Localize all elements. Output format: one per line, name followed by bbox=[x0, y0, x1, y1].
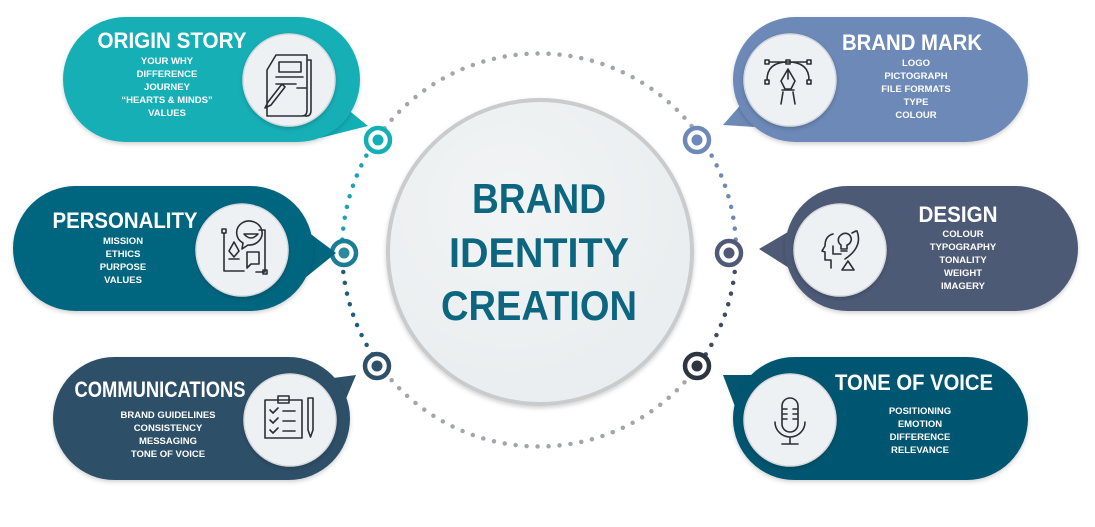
panel: design: COLOUR bbox=[942, 229, 984, 240]
node: origin bbox=[366, 128, 390, 152]
panel: personality: VALUES bbox=[104, 275, 142, 286]
panel: communications: TONE OF VOICE bbox=[131, 449, 205, 460]
panel: tone of voice: EMOTION bbox=[898, 419, 942, 430]
title: BRAND bbox=[472, 175, 606, 222]
panel: communications: MESSAGING bbox=[139, 436, 197, 447]
panel: personality: MISSION bbox=[103, 236, 143, 247]
panel: brand mark: LOGO bbox=[902, 58, 930, 69]
panel: tone of voice: DIFFERENCE bbox=[890, 432, 950, 443]
title: IDENTITY bbox=[449, 229, 629, 276]
panel: brand mark: PICTOGRAPH bbox=[884, 71, 948, 82]
panel: brand mark: COLOUR bbox=[895, 110, 937, 121]
panel: design: TONALITY bbox=[939, 255, 987, 266]
panel: design: TYPOGRAPHY bbox=[930, 242, 997, 253]
center circle bbox=[388, 100, 692, 404]
node: communications bbox=[365, 354, 389, 378]
panel: brand mark bbox=[723, 17, 1028, 142]
panel: design: DESIGN bbox=[918, 202, 998, 227]
panel: design bbox=[759, 186, 1078, 311]
panel: personality bbox=[13, 186, 336, 311]
panel: design: IMAGERY bbox=[941, 281, 986, 292]
panel: origin story: “HEARTS & MINDS” bbox=[121, 95, 213, 106]
panel: communications: COMMUNICATIONS bbox=[74, 377, 246, 402]
icon: pen tool bbox=[744, 34, 836, 126]
panel: communications: BRAND GUIDELINES bbox=[120, 410, 216, 421]
panel: origin story: JOURNEY bbox=[144, 82, 191, 93]
panel: brand mark: FILE FORMATS bbox=[881, 84, 951, 95]
panel: origin story: VALUES bbox=[148, 108, 186, 119]
icon: document bbox=[243, 34, 335, 126]
panel: personality: PERSONALITY bbox=[52, 208, 198, 233]
title: CREATION bbox=[441, 282, 637, 329]
panel: tone of voice: TONE OF VOICE bbox=[835, 370, 993, 395]
panel: brand mark: TYPE bbox=[904, 97, 928, 108]
panel: origin story: ORIGIN STORY bbox=[98, 28, 247, 53]
panel: origin story bbox=[63, 17, 368, 142]
icon: smiling speech bbox=[196, 204, 288, 296]
node: design bbox=[717, 241, 741, 265]
panel: origin story: DIFFERENCE bbox=[137, 69, 197, 80]
panel: tone of voice: RELEVANCE bbox=[891, 445, 949, 456]
panel: personality: ETHICS bbox=[106, 249, 140, 260]
panel: communications: CONSISTENCY bbox=[134, 423, 203, 434]
panel: tone of voice bbox=[723, 357, 1028, 480]
node: brand mark bbox=[685, 128, 709, 152]
panel: tone of voice: POSITIONING bbox=[889, 406, 951, 417]
panel: design: WEIGHT bbox=[944, 268, 982, 279]
title bbox=[441, 175, 637, 329]
icon: head with bulb bbox=[794, 204, 886, 296]
dotted ring bbox=[342, 54, 736, 446]
icon: microphone bbox=[744, 374, 836, 466]
node: tone bbox=[685, 354, 709, 378]
panel: brand mark: BRAND MARK bbox=[842, 30, 982, 55]
panel: communications bbox=[53, 357, 356, 480]
panel: personality: PURPOSE bbox=[100, 262, 146, 273]
icon: clipboard bbox=[244, 374, 336, 466]
panel: origin story: YOUR WHY bbox=[141, 56, 194, 67]
node: personality bbox=[332, 241, 356, 265]
